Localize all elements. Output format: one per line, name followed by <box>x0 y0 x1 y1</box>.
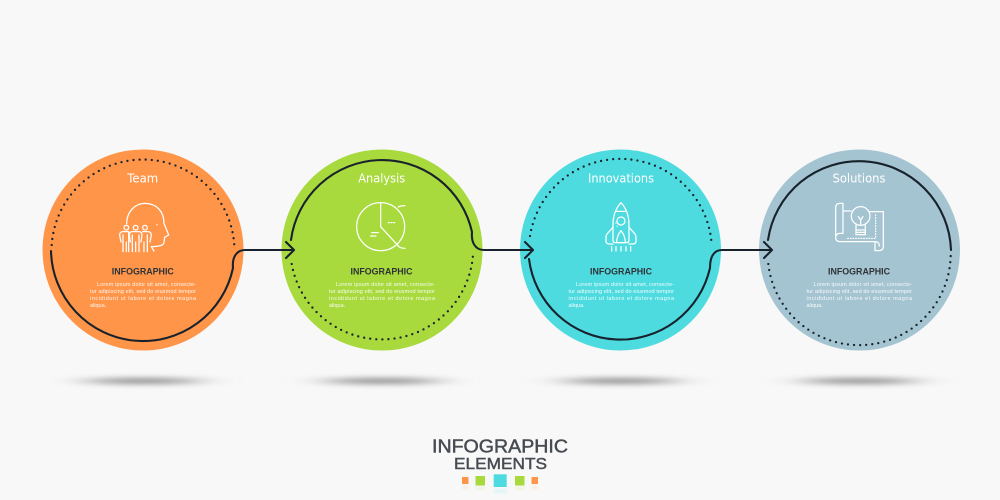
footer square row <box>462 474 538 493</box>
analysis heading: Analysis <box>358 172 405 186</box>
solutions circle <box>759 150 960 350</box>
analysis body text: tur adipiscing elit, sed do eiusmod tempor <box>329 289 435 295</box>
team body text: tur adipiscing elit, sed do eiusmod tempor <box>90 289 196 295</box>
team body text: Lorem ipsum dolor sit amet, consecte- <box>97 282 196 288</box>
solutions body text: aliqua. <box>806 303 823 309</box>
innovations body text <box>568 282 675 309</box>
innovations heading: Innovations <box>588 172 654 186</box>
icon: blueprint with light bulb <box>836 203 883 251</box>
analysis circle <box>282 150 482 350</box>
shadow: solutions <box>802 378 918 384</box>
innovations subheading: INFOGRAPHIC <box>590 266 652 276</box>
analysis solid connector arrow <box>291 160 533 258</box>
innovations circle <box>520 150 721 350</box>
innovations body text: tur adipiscing elit, sed do eiusmod tempor <box>568 289 674 295</box>
analysis body text: aliqua. <box>329 303 346 309</box>
innovations body text: Lorem ipsum dolor sit amet, consecte- <box>576 282 674 288</box>
analysis body text <box>329 282 436 309</box>
innovations body text: incididunt ut labore et dolore magna <box>568 296 675 302</box>
solutions solid arc <box>768 161 951 250</box>
team heading: Team <box>126 172 158 186</box>
innovations body text: aliqua. <box>568 303 585 309</box>
solutions dotted arc <box>768 255 951 345</box>
analysis subheading: INFOGRAPHIC <box>350 266 413 276</box>
icon: rocket <box>606 203 636 251</box>
team body text: incididunt ut labore et dolore magna <box>90 296 197 302</box>
analysis body text: Lorem ipsum dolor sit amet, consecte- <box>336 282 435 288</box>
solutions body text: incididunt ut labore et dolore magna <box>806 296 913 302</box>
footer title: ELEMENTS <box>454 456 547 473</box>
solutions subheading: INFOGRAPHIC <box>828 266 890 276</box>
analysis body text: incididunt ut labore et dolore magna <box>329 296 436 302</box>
solutions heading: Solutions <box>832 172 886 186</box>
analysis dotted arc <box>292 255 473 339</box>
shadow: team <box>85 378 201 384</box>
team body text <box>90 282 197 309</box>
footer title <box>432 435 568 473</box>
solutions body text: tur adipiscing elit, sed do eiusmod tempor <box>806 289 912 295</box>
icon: team head with people <box>120 203 169 252</box>
icon: pie chart <box>357 203 405 251</box>
innovations solid connector arrow <box>529 242 772 340</box>
team solid connector arrow <box>51 242 294 341</box>
panel: innovations <box>520 150 772 350</box>
innovations dotted arc <box>530 159 712 245</box>
team dotted arc <box>52 160 234 245</box>
solutions body text <box>806 282 913 309</box>
panel: analysis <box>282 150 533 350</box>
panel: solutions <box>759 150 960 350</box>
footer title: INFOGRAPHIC <box>432 435 568 456</box>
solutions body text: Lorem ipsum dolor sit amet, consecte- <box>814 282 912 288</box>
shadow: innovations <box>562 378 678 384</box>
panel: team <box>42 150 294 350</box>
shadow: analysis <box>324 378 440 384</box>
team subheading: INFOGRAPHIC <box>112 266 174 276</box>
team body text: aliqua. <box>90 303 107 309</box>
team circle <box>42 150 244 350</box>
